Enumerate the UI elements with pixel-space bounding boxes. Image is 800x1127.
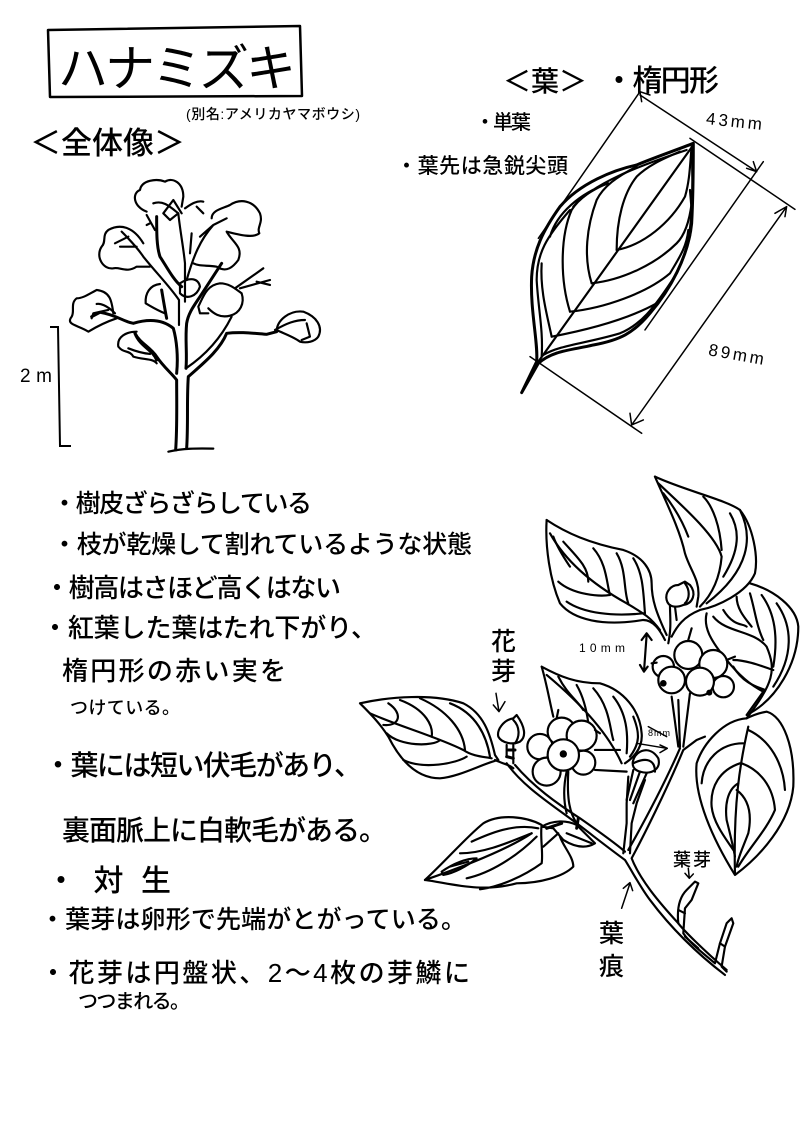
text block: bud notes: ・対生 <box>46 865 171 898</box>
label: 8mm: 8mm <box>648 728 670 738</box>
label: flower bud: 芽 <box>491 658 516 686</box>
height scale: 2m <box>20 327 71 446</box>
label: leaf scar: 痕 <box>599 953 624 981</box>
text block: bark and height notes: ・樹皮ざらざらしている <box>52 489 312 518</box>
text block: bud notes: ・花芽は円盤状、2〜4枚の芽鱗に <box>40 958 470 988</box>
upper berries <box>652 628 735 697</box>
leaf: lower right <box>696 712 793 875</box>
leaf: bottom <box>425 817 595 889</box>
label: 10mm: 10mm <box>579 641 625 655</box>
arrow to flower bud <box>493 693 505 712</box>
text block: leaf hair notes: 裏面脈上に白軟毛がある。 <box>62 815 387 846</box>
text block: bark and height notes: ・樹高はさほど高くはない <box>44 573 341 603</box>
leaf: top <box>655 477 756 637</box>
measurement arrow: 8mm <box>637 727 667 753</box>
leaf diagram <box>522 92 795 433</box>
flower buds <box>498 582 693 803</box>
measurement arrow: 10mm <box>640 633 652 672</box>
heading: leaf: ＜葉＞ <box>503 66 587 97</box>
tree illustration <box>70 180 320 452</box>
arrow to leaf scar <box>622 883 633 908</box>
text block: bud notes: つつまれる。 <box>78 991 190 1013</box>
leaf note: simple leaf: ・単葉 <box>475 111 531 134</box>
text block: bud notes: ・葉芽は卵形で先端がとがっている。 <box>40 906 466 934</box>
subtitle: alternate name: (別名:アメリカヤマボウシ) <box>186 106 360 122</box>
label: leaf scar: 葉 <box>599 920 624 948</box>
text block: leaf hair notes <box>44 750 387 846</box>
heading: whole tree: ＜全体像＞ <box>30 126 185 161</box>
leaf: centre <box>542 667 642 763</box>
height scale: 2m: 2m <box>20 366 52 387</box>
centre berries <box>527 710 627 786</box>
leaf note: acute tip: ・葉先は急鋭尖頭 <box>396 155 568 178</box>
title box: ハナミズキ <box>58 41 296 97</box>
leaf: left <box>360 697 513 778</box>
arrow to leaf bud <box>685 868 693 878</box>
text block: bark and height notes: ・枝が乾燥して割れているような状態 <box>52 531 472 559</box>
text block: bark and height notes: 楕円形の赤い実を <box>62 656 286 686</box>
branch stems <box>507 693 733 975</box>
text block: bud notes <box>40 865 470 1013</box>
dimension: 43mm: 43mm <box>705 109 763 134</box>
text block: bark and height notes: つけている。 <box>70 698 180 718</box>
text block: bark and height notes <box>42 489 472 718</box>
text block: leaf hair notes: ・葉には短い伏毛があり、 <box>44 750 362 781</box>
leaf: right <box>706 583 798 718</box>
botanical branch illustration <box>360 477 798 975</box>
label: flower bud: 花 <box>491 628 516 656</box>
leaf shape label: ・楕円形 <box>604 65 719 98</box>
text block: bark and height notes: ・紅葉した葉はたれ下がり、 <box>42 613 377 643</box>
dimension: 89mm: 89mm <box>707 340 765 369</box>
leaf: upper left <box>546 520 667 640</box>
label: leaf scar <box>599 920 624 981</box>
label: leaf bud: 葉芽 <box>673 850 711 870</box>
label: flower bud <box>491 628 516 686</box>
